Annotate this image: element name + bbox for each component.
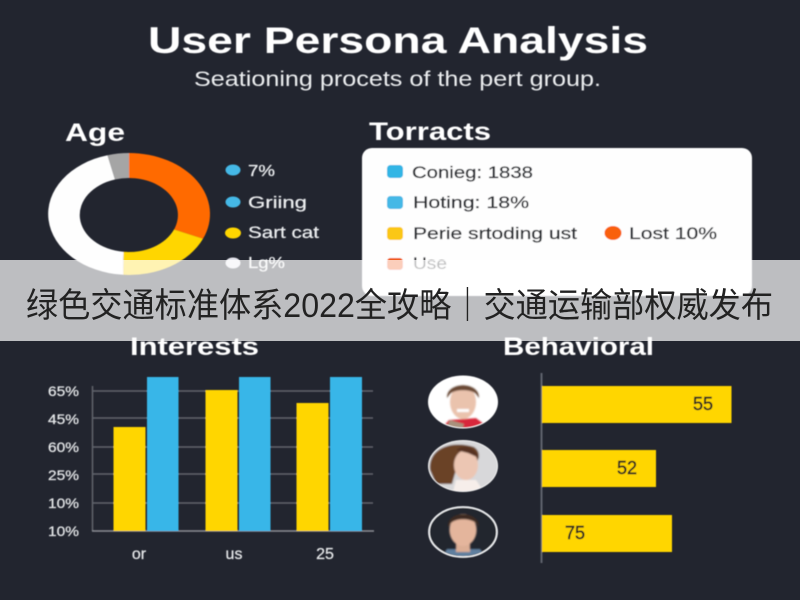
icon: avatar man in red shirt [428, 376, 498, 430]
bar chart: behavioral: 75 [565, 523, 585, 543]
donut chart: age [48, 153, 210, 275]
bar chart: behavioral: 52 [617, 458, 637, 478]
icon: avatar woman with curly hair [428, 440, 498, 492]
bar chart: interests: 60% [48, 439, 79, 455]
bar chart: interests: 10% [48, 495, 79, 511]
heading: behavioral: Behavioral [503, 333, 654, 361]
legend: age [225, 163, 319, 272]
subtitle: Seationing procets of the pert group. [194, 68, 601, 91]
panel: torracts legend card: Perie srtoding ust [413, 225, 578, 243]
heading: torracts: Torracts [369, 118, 491, 146]
bar chart: interests: 25 [316, 546, 334, 563]
bar chart: behavioral [542, 373, 732, 563]
legend: age: Sart cat [248, 223, 319, 242]
heading: age: Age [65, 119, 125, 147]
bar chart: interests [48, 377, 374, 563]
bar chart: interests: 25% [48, 467, 79, 483]
panel: torracts legend card: Use [413, 255, 447, 273]
icon: avatar man on dark background [429, 507, 497, 560]
bar chart: interests: or [132, 546, 147, 563]
bar chart: behavioral: 55 [693, 394, 713, 414]
panel: torracts legend card: Conieg: 1838 [412, 164, 533, 182]
title: User Persona Analysis [148, 20, 648, 61]
caption band: 绿色交通标准体系2022全攻略｜交通运输部权威发布 [26, 287, 773, 325]
panel: torracts legend card [362, 148, 752, 296]
heading: interests: Interests [130, 333, 259, 361]
bar chart: interests: 65% [48, 383, 79, 399]
legend: age: Griing [248, 193, 307, 212]
bar chart: interests: us [226, 546, 242, 563]
panel: torracts legend card: Lost 10% [629, 225, 717, 243]
legend: age: Lg% [248, 255, 285, 272]
legend: age: 7% [248, 163, 275, 180]
bar chart: interests: 45% [48, 411, 79, 427]
panel: torracts legend card: Hoting: 18% [413, 194, 529, 212]
bar chart: interests: 10% [48, 523, 79, 539]
caption band [0, 260, 800, 341]
